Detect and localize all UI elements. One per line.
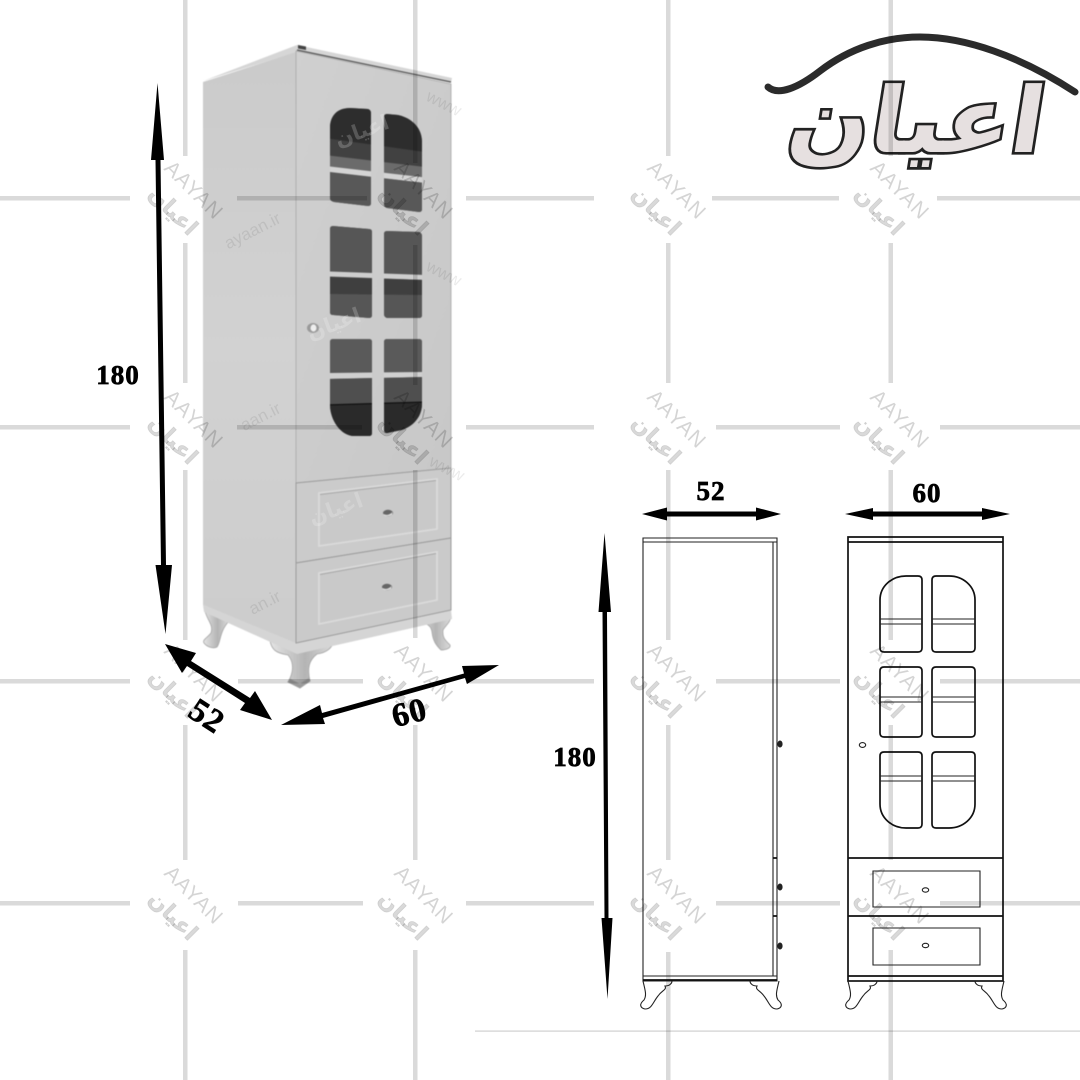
- window middle right: [932, 667, 975, 737]
- watermark labels, row 2: اعیان: [373, 411, 432, 470]
- cabinet top: [203, 45, 452, 83]
- watermark labels, row 2: AAYAN: [390, 385, 458, 453]
- watermark labels, row 4: AAYAN: [643, 861, 711, 929]
- watermark labels, row 1: اعیان: [373, 182, 432, 241]
- side knobs: [777, 740, 783, 950]
- cabinet website watermarks: aan.ir: [237, 398, 284, 435]
- side drawer marks: [643, 858, 777, 980]
- drawer 2: [296, 538, 451, 643]
- side top lines: [643, 542, 777, 976]
- watermark labels, row 4: [143, 861, 934, 946]
- technical height label 180: 180: [553, 742, 597, 772]
- watermark labels, row 4: AAYAN: [866, 861, 934, 929]
- window middle left: [880, 667, 922, 737]
- watermark labels, row 3: اعیان: [373, 665, 432, 724]
- watermark labels, row 3: AAYAN: [160, 639, 228, 707]
- side outline: [643, 538, 777, 981]
- cabinet side panel: [203, 52, 296, 643]
- watermark labels, row 4: اعیان: [626, 887, 685, 946]
- side view width arrow: [642, 508, 781, 520]
- glass windows: [325, 100, 425, 440]
- watermark labels, row 1: اعیان: [626, 182, 685, 241]
- brand logo: [768, 37, 1075, 174]
- cabinet website watermarks: [221, 86, 468, 619]
- cabinet logo watermarks: اعیان: [304, 303, 364, 345]
- baseline rule: [475, 1030, 1080, 1032]
- door knob: [307, 323, 319, 333]
- watermark labels, row 2: اعیان: [849, 411, 908, 470]
- cabinet website watermarks: ayaan.ir: [221, 208, 284, 253]
- front view width arrow: [845, 508, 1010, 520]
- logo wordmark: اعیان: [781, 69, 1053, 174]
- drawer knobs: [922, 888, 929, 948]
- technical drawing: side view: [641, 538, 783, 1009]
- cabinet logo watermarks: اعیان: [332, 110, 392, 152]
- watermark labels, row 4: اعیان: [143, 887, 202, 946]
- height arrow on 3D view: [151, 83, 172, 634]
- watermark labels, row 3: اعیان: [626, 665, 685, 724]
- drawer panels: [873, 871, 980, 965]
- logo roof arc: [768, 37, 1075, 92]
- watermark labels, row 2: [143, 385, 934, 470]
- watermark labels, row 4: اعیان: [849, 887, 908, 946]
- watermark labels, row 3: [143, 639, 934, 724]
- watermark labels, row 4: AAYAN: [160, 861, 228, 929]
- watermark labels, row 2: AAYAN: [643, 385, 711, 453]
- window top left: [880, 576, 922, 652]
- front view width label 60: 60: [912, 478, 942, 508]
- watermark labels, row 1: اعیان: [849, 182, 908, 241]
- watermark labels, row 2: اعیان: [626, 411, 685, 470]
- window shelf bands: [880, 619, 975, 781]
- watermark labels, row 1: [143, 156, 934, 241]
- watermark labels, row 2: اعیان: [143, 411, 202, 470]
- cabinet logo watermarks: اعیان: [306, 488, 366, 530]
- watermark labels, row 1: AAYAN: [160, 156, 228, 224]
- watermark labels, row 2: AAYAN: [866, 385, 934, 453]
- cabinet door: [296, 51, 451, 483]
- vertical grid lines: [183, 0, 893, 1080]
- watermark labels, row 3: اعیان: [143, 665, 202, 724]
- technical drawing: front view: [846, 537, 1006, 1009]
- cabinet website watermarks: www: [422, 86, 465, 121]
- front feet: [846, 981, 1006, 1009]
- cabinet base plinth: [203, 605, 452, 654]
- depth arrow on 3D view: [165, 644, 272, 720]
- cabinet website watermarks: www: [422, 256, 465, 291]
- technical height arrow: [598, 533, 612, 999]
- width label 60: 60: [388, 692, 431, 735]
- brand plate: [298, 45, 306, 50]
- height label 180: 180: [96, 360, 140, 390]
- watermark labels, row 2: AAYAN: [160, 385, 228, 453]
- watermark labels, row 1: AAYAN: [390, 156, 458, 224]
- furniture illustration: 3D cabinet: [203, 45, 452, 688]
- side view width label 52: 52: [696, 476, 726, 506]
- cabinet website watermarks: an.ir: [246, 586, 284, 619]
- front outline: [848, 537, 1003, 981]
- watermark labels, row 3: AAYAN: [390, 639, 458, 707]
- depth label 52: 52: [182, 692, 231, 741]
- watermark labels, row 4: اعیان: [373, 887, 432, 946]
- watermark labels, row 4: AAYAN: [390, 861, 458, 929]
- top dark edge: [297, 50, 451, 82]
- window top right: [932, 576, 975, 652]
- watermark labels, row 1: AAYAN: [866, 156, 934, 224]
- door knob: [859, 743, 866, 747]
- window bottom right: [932, 752, 975, 828]
- watermark labels, row 3: AAYAN: [643, 639, 711, 707]
- drawer 1: [296, 468, 451, 563]
- width arrow on 3D view: [281, 665, 499, 725]
- watermark labels, row 1: اعیان: [143, 182, 202, 241]
- cabinet logo watermarks: [304, 110, 392, 530]
- cabinet website watermarks: www: [425, 451, 468, 486]
- cabinet legs: [204, 607, 451, 688]
- front base lines: [848, 858, 1003, 976]
- watermark labels, row 3: AAYAN: [866, 639, 934, 707]
- watermark labels, row 1: AAYAN: [643, 156, 711, 224]
- horizontal grid lines: [0, 196, 1080, 906]
- side feet: [641, 981, 781, 1009]
- watermark labels, row 3: اعیان: [849, 665, 908, 724]
- window bottom left: [880, 752, 922, 828]
